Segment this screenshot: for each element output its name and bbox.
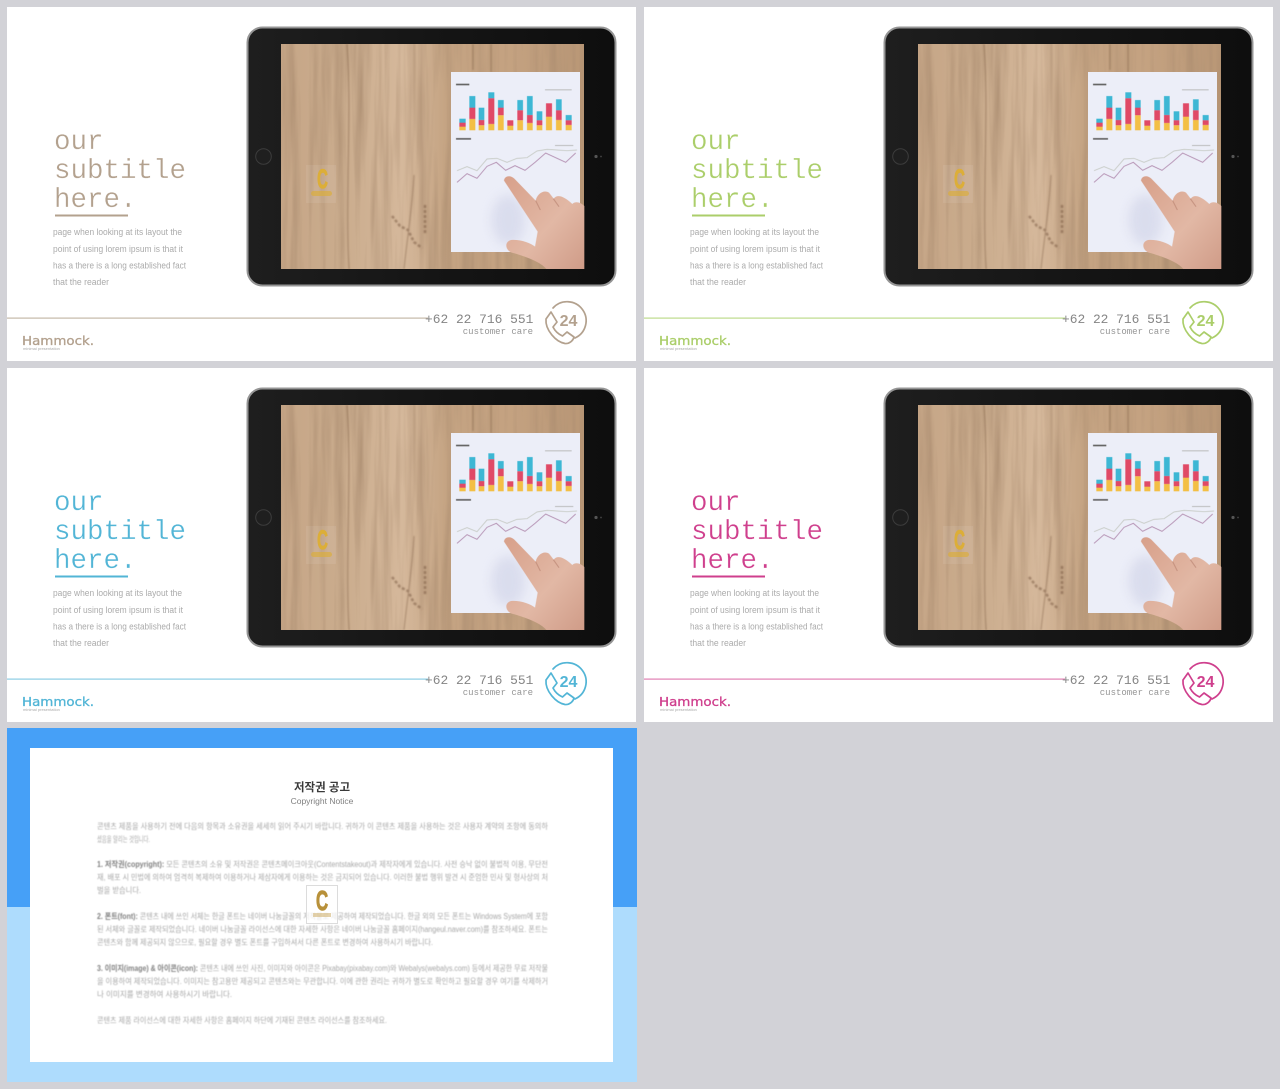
- tablet mockup with chart photo: [884, 388, 1252, 646]
- Hammock logo: minimal presentation: [23, 346, 60, 351]
- copyright body text: 콘텐츠 제품 라이선스에 대한 자세한 사항은 홈페이지 하단에 기재된 콘텐츠 라이선스를 참조하세요.: [97, 1015, 387, 1025]
- watermark badge: [306, 885, 338, 924]
- icon: 24h phone: [1183, 302, 1223, 344]
- subtitle heading: subtitle: [691, 156, 823, 187]
- body text: has a there is a long established fact: [690, 622, 823, 632]
- body text: has a there is a long established fact: [53, 260, 186, 270]
- footer line: [644, 318, 1065, 319]
- subtitle heading: here.: [54, 546, 137, 577]
- subtitle heading: subtitle: [54, 156, 186, 187]
- heading underline: [55, 214, 128, 216]
- tablet mockup with chart photo: [248, 28, 616, 286]
- subtitle heading: here.: [691, 546, 774, 577]
- copyright body text: 재, 배포 시 민법에 의하여 엄격히 복제하여 이용하거나 제삼자에게 이용하는 것은 금지되어 있습니다. 이러한 불법 행위 발견 시 준엄한 민사 및 형사상의 처: [97, 872, 548, 882]
- Hammock logo: Hammock.: [22, 694, 94, 709]
- body text: [53, 588, 186, 648]
- subtitle heading: [54, 488, 186, 577]
- body text: [53, 227, 186, 287]
- phone number: +62 22 716 551: [425, 312, 534, 327]
- subtitle heading: our: [54, 488, 104, 519]
- body text: page when looking at its layout the: [690, 227, 819, 237]
- body text: that the reader: [53, 638, 109, 648]
- copyright body text: 2. 폰트(font): 콘텐츠 내에 쓰인 서체는 한글 폰트는 네이버 나눔글꼴의 저작물로 제공하여 제작되었습니다. 한글 외의 모든 폰트는 Windows System에 포함: [97, 911, 549, 921]
- icon: 24h phone: [1183, 663, 1223, 705]
- copyright body text: 콘텐츠와 함께 제공되지 않으므로, 필요할 경우 별도 폰트를 구입하셔서 다른 폰트로 변경하여 사용하시기 바랍니다.: [97, 937, 433, 947]
- copyright body text: 1. 저작권(copyright): 모든 콘텐츠의 소유 및 저작권은 콘텐츠메이크아웃(Contentstakeout)과 제작자에게 있습니다. 사전 승낙 없이 불법적 이용, 무단전: [97, 859, 548, 869]
- customer care label: customer care: [463, 327, 533, 337]
- subtitle heading: our: [691, 488, 741, 519]
- phone number: +62 22 716 551: [425, 673, 534, 688]
- footer line: [644, 678, 1065, 680]
- copyright body text: 3. 이미지(image) & 아이콘(icon): 콘텐츠 내에 쓰인 사진, 이미지와 아이콘은 Pixabay(pixabay.com)와 Webalys(webalys.com) 등에서 제공한 무료 저작물: [97, 963, 548, 973]
- heading underline: [55, 576, 128, 578]
- copyright body text: 콘텐츠 제품을 사용하기 전에 다음의 항목과 소유권을 세세히 읽어 주시기 바랍니다. 귀하가 이 콘텐츠 제품을 사용하는 것은 사용자 계약의 조항에 동의하: [97, 821, 549, 831]
- body text: point of using lorem ipsum is that it: [690, 244, 820, 254]
- subtitle heading: our: [691, 127, 741, 158]
- panel: copyright notice: [7, 728, 637, 1082]
- icon: 24h phone: 24: [1197, 674, 1214, 691]
- subtitle heading: here.: [54, 185, 137, 216]
- Hammock logo: Hammock.: [22, 333, 94, 348]
- body text: [690, 227, 823, 287]
- icon: 24h phone: 24: [560, 674, 578, 691]
- customer care label: customer care: [1100, 688, 1170, 698]
- copyright title: 저작권 공고: [294, 780, 350, 794]
- subtitle heading: [691, 127, 823, 216]
- body text: point of using lorem ipsum is that it: [53, 244, 183, 254]
- body text: [690, 588, 823, 648]
- body text: page when looking at its layout the: [690, 588, 819, 598]
- body text: that the reader: [53, 277, 109, 287]
- copyright body text: 나 이미지를 변경하여 사용하시기 바랍니다.: [97, 989, 232, 999]
- icon: 24h phone: 24: [1197, 313, 1214, 330]
- panel: green slide: [644, 7, 1273, 361]
- tablet mockup with chart photo: [884, 28, 1252, 286]
- copyright body text: 셨음을 알리는 것입니다.: [97, 834, 150, 844]
- Hammock logo: minimal presentation: [23, 707, 60, 712]
- body text: has a there is a long established fact: [53, 622, 186, 632]
- Hammock logo: minimal presentation: [660, 707, 697, 712]
- footer line: [7, 318, 428, 319]
- copyright body text: [97, 821, 549, 1025]
- subtitle heading: subtitle: [691, 517, 823, 548]
- copyright body text: 벌을 받습니다.: [97, 885, 141, 895]
- Hammock logo: minimal presentation: [660, 346, 697, 351]
- customer care label: customer care: [463, 688, 533, 698]
- Hammock logo: Hammock.: [659, 333, 731, 348]
- body text: point of using lorem ipsum is that it: [53, 605, 183, 615]
- panel: blue slide: [7, 368, 636, 722]
- subtitle heading: [54, 127, 186, 216]
- body text: has a there is a long established fact: [690, 260, 823, 270]
- panel: brown slide: [7, 7, 636, 361]
- Hammock logo: Hammock.: [659, 694, 731, 709]
- heading underline: [692, 214, 765, 216]
- copyright subtitle: Copyright Notice: [291, 796, 354, 806]
- copyright body text: 된 서체와 글꼴로 제작되었습니다. 네이버 나눔글꼴 라이선스에 대한 자세한 사항은 네이버 나눔글꼴 홈페이지(hangeul.naver.com)를 참조하세요. 폰트는: [97, 924, 548, 934]
- body text: that the reader: [690, 638, 746, 648]
- icon: 24h phone: [546, 663, 586, 705]
- panel: pink slide: [644, 368, 1273, 722]
- watermark badge: C: [316, 885, 328, 916]
- phone number: +62 22 716 551: [1062, 312, 1171, 327]
- subtitle heading: here.: [691, 185, 774, 216]
- customer care label: customer care: [1100, 327, 1170, 337]
- copyright body text: 을 이용하여 제작되었습니다. 이미지는 참고용만 제공되고 콘텐츠와는 무관합니다. 이에 관한 권리는 귀하가 별도로 확인하고 필요할 경우 여기를 삭제하거: [97, 976, 548, 986]
- heading underline: [692, 576, 765, 578]
- phone number: +62 22 716 551: [1062, 673, 1171, 688]
- body text: that the reader: [690, 277, 746, 287]
- subtitle heading: [691, 488, 823, 577]
- tablet mockup with chart photo: [248, 388, 616, 646]
- body text: point of using lorem ipsum is that it: [690, 605, 820, 615]
- body text: page when looking at its layout the: [53, 227, 182, 237]
- body text: page when looking at its layout the: [53, 588, 182, 598]
- icon: 24h phone: [546, 302, 586, 344]
- subtitle heading: subtitle: [54, 517, 186, 548]
- icon: 24h phone: 24: [560, 313, 578, 330]
- footer line: [7, 678, 428, 680]
- subtitle heading: our: [54, 127, 104, 158]
